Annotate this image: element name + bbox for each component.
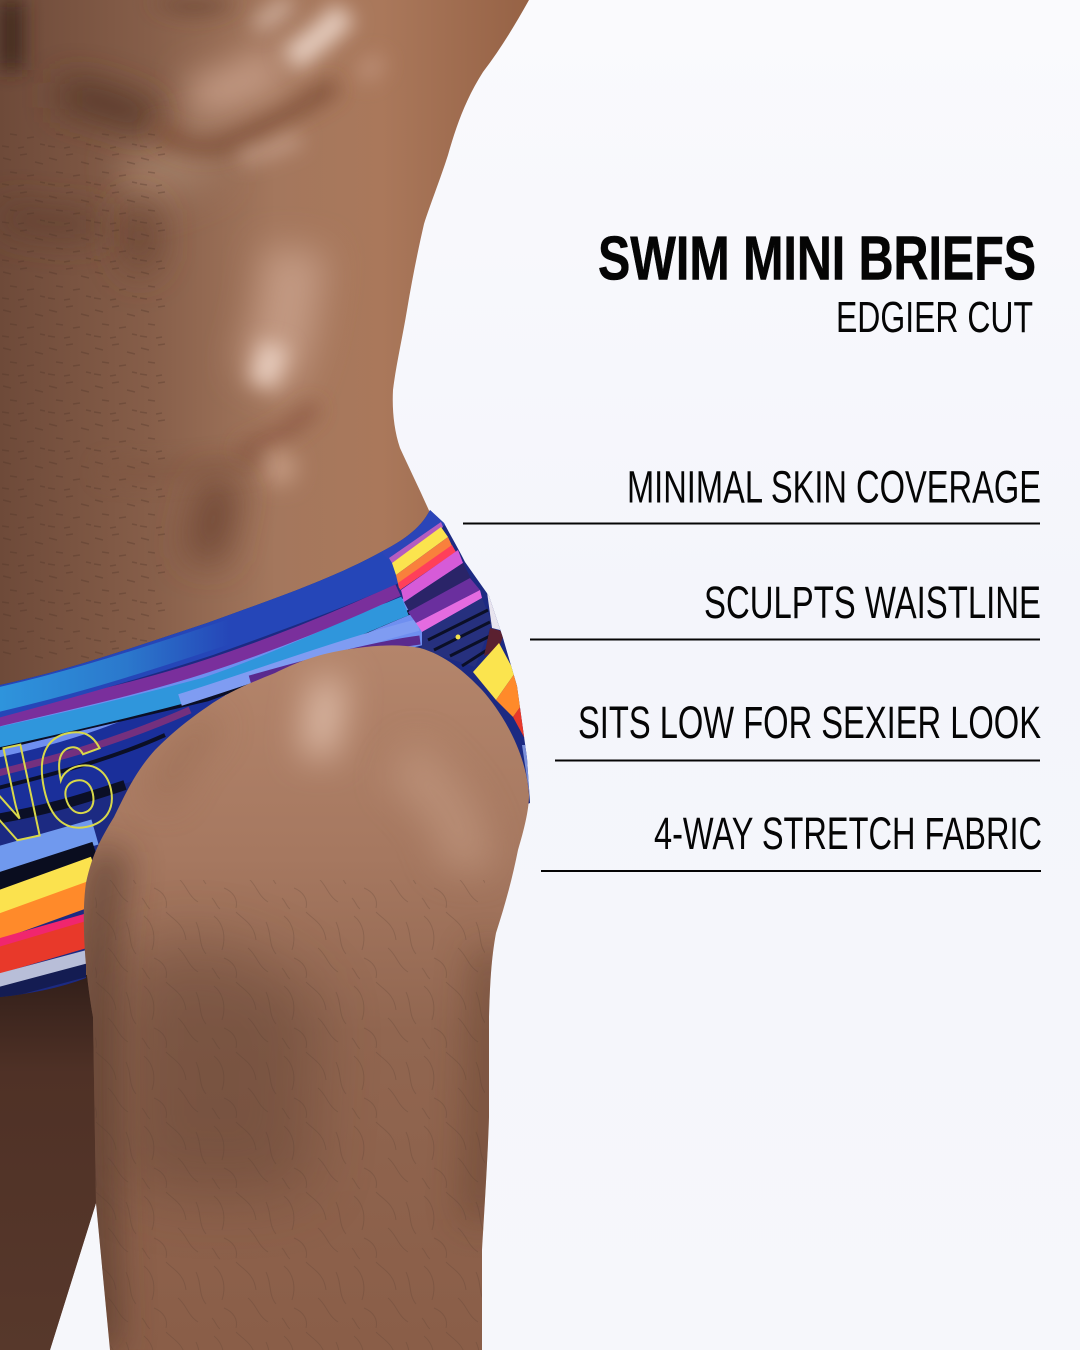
- print stripes: side panel: [381, 510, 531, 805]
- photo: torso and near leg: [0, 0, 540, 1350]
- thigh: [60, 630, 540, 1350]
- swim mini briefs: [0, 500, 540, 1000]
- print stripes: front panel: [0, 565, 420, 820]
- print stripes: lower rainbow: [0, 832, 95, 996]
